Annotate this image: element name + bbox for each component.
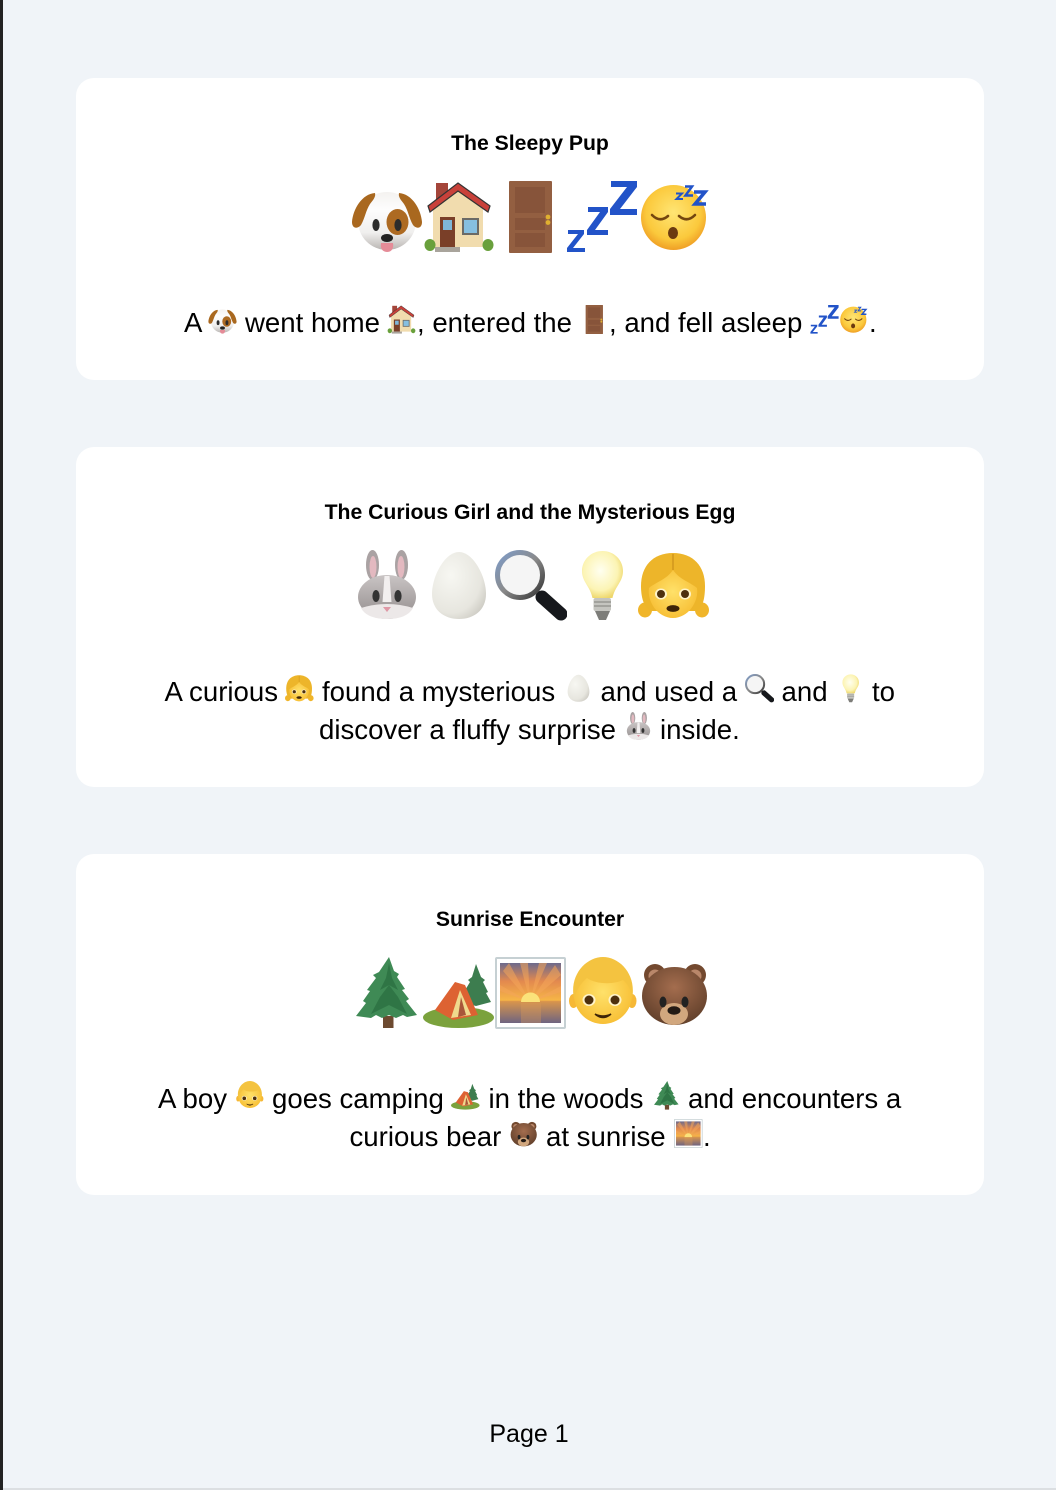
emoji row: dog, house, door, zzz, sleeping face: [352, 181, 709, 253]
story text with inline emoji: and encounters a: [688, 1083, 901, 1114]
icon: egg: [568, 674, 590, 702]
story text with inline emoji: A curious: [164, 676, 278, 707]
story text with inline emoji: .: [703, 1121, 711, 1152]
story text with inline emoji: .: [869, 307, 877, 338]
panel: The Sleepy Pup: [76, 78, 984, 380]
panel: Sunrise Encounter: [76, 854, 984, 1195]
story text with inline emoji: A boy: [158, 1083, 227, 1114]
icon: magnifier: [745, 674, 774, 702]
icon: boy: [236, 1081, 264, 1108]
story text with inline emoji: inside.: [660, 714, 740, 745]
story text with inline emoji: [164, 674, 895, 745]
heading: Sunrise Encounter: Sunrise Encounter: [436, 908, 624, 931]
icon: light bulb: [842, 674, 859, 702]
heading: The Curious Girl and the Mysterious Egg: The Curious Girl and the Mysterious Egg: [325, 501, 735, 524]
icon: bear: [510, 1122, 537, 1146]
story text with inline emoji: to: [872, 676, 895, 707]
story text with inline emoji: and used a: [600, 676, 737, 707]
story text with inline emoji: in the woods: [488, 1083, 643, 1114]
emoji row: tree, camping, sunrise, boy, bear: [356, 957, 707, 1029]
story text with inline emoji: goes camping: [272, 1083, 444, 1114]
icon: camping: [451, 1084, 480, 1110]
story text with inline emoji: found a mysterious: [322, 676, 555, 707]
story text with inline emoji: discover a fluffy surprise: [319, 714, 616, 745]
story text with inline emoji: went home: [245, 307, 380, 338]
story text with inline emoji: at sunrise: [546, 1121, 666, 1152]
story text with inline emoji: , and fell asleep: [609, 307, 802, 338]
story text with inline emoji: and: [782, 676, 828, 707]
icon: rabbit: [626, 712, 650, 740]
story text with inline emoji: [184, 305, 877, 338]
story text with inline emoji: A: [184, 307, 202, 338]
icon: tree: [654, 1081, 678, 1110]
story text with inline emoji: [158, 1081, 902, 1152]
panel: The Curious Girl and the Mysterious Egg: [76, 447, 984, 787]
icon: girl: [285, 675, 314, 702]
icon: door: [586, 305, 603, 334]
icon: dog: [208, 310, 237, 334]
icon: sleeping face: [840, 306, 868, 333]
icon: zzz: [810, 305, 839, 334]
icon: sunrise: [674, 1119, 703, 1148]
story text with inline emoji: curious bear: [350, 1121, 501, 1152]
story text with inline emoji: , entered the: [417, 307, 572, 338]
icon: house: [388, 306, 416, 334]
heading: The Sleepy Pup: The Sleepy Pup: [451, 132, 609, 155]
emoji row: rabbit, egg, magnifier, bulb, girl: [358, 550, 709, 620]
page number: Page 1: [489, 1420, 569, 1448]
